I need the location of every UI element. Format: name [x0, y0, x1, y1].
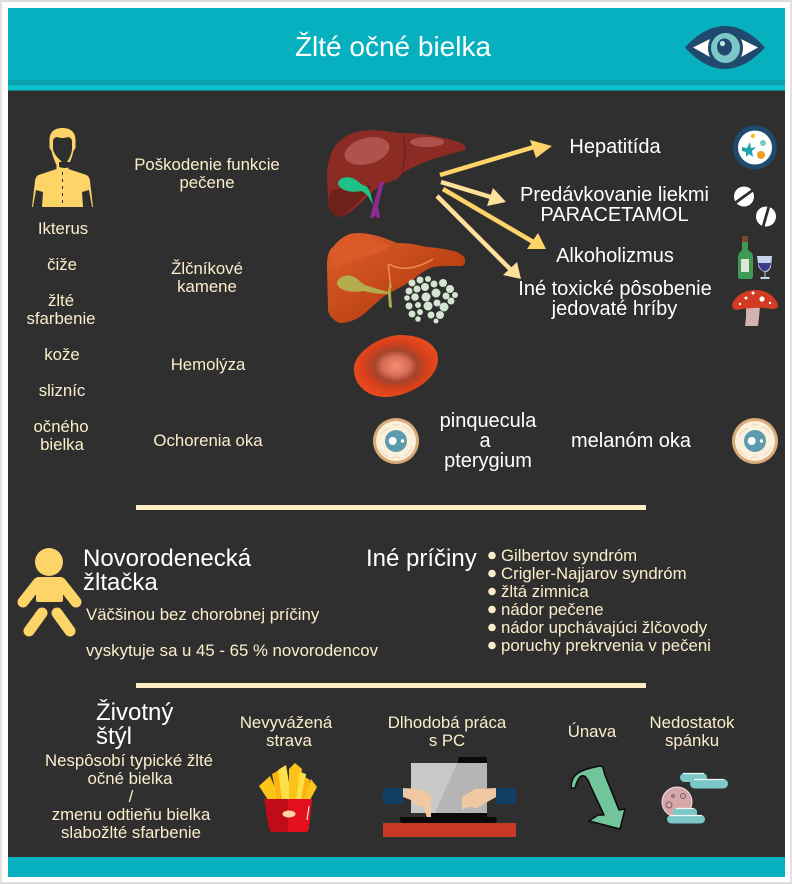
- left column: symptoms: bielka: [40, 435, 85, 454]
- eye condition labels: pinquecula: [440, 410, 537, 432]
- cause labels: Žlčníkové: [171, 259, 243, 278]
- outcome labels: Iné toxické pôsobenie: [518, 278, 712, 300]
- other causes list: Crigler-Najjarov syndróm: [501, 564, 687, 583]
- newborn heading: Novorodenecká: [83, 545, 252, 572]
- divider: [136, 683, 646, 688]
- icon: eyeball right: [732, 418, 778, 464]
- newborn text: Väčšinou bez chorobnej príčiny: [86, 605, 320, 624]
- lifestyle heading: Životný: [96, 699, 173, 726]
- lifestyle factor labels: spánku: [665, 731, 719, 750]
- cause labels: Ochorenia oka: [153, 431, 263, 450]
- lifestyle text: /: [129, 787, 134, 806]
- lifestyle factor labels: Nedostatok: [650, 713, 735, 732]
- newborn heading: žltačka: [83, 569, 158, 596]
- left column: symptoms: slizníc: [39, 381, 85, 400]
- lifestyle factor labels: strava: [266, 731, 313, 750]
- left column: symptoms: očného: [33, 417, 89, 436]
- header band: [8, 8, 785, 90]
- left column: symptoms: žlté: [48, 291, 74, 310]
- eye condition labels: pterygium: [444, 450, 532, 472]
- footer band: [8, 857, 785, 877]
- left column: symptoms: [26, 219, 96, 454]
- icon: bacteria dish: [733, 126, 777, 170]
- lifestyle text: zmenu odtieňu bielka: [52, 805, 211, 824]
- icon: baby: [23, 548, 76, 631]
- title: Žlté očné bielka: [295, 31, 491, 62]
- icon: eye: [685, 26, 765, 69]
- outcome labels: [518, 136, 712, 320]
- newborn text: vyskytuje sa u 45 - 65 % novorodencov: [86, 641, 379, 660]
- icon: moon and clouds: [662, 773, 728, 824]
- left column: symptoms: čiže: [47, 255, 77, 274]
- outcome labels: Alkoholizmus: [556, 245, 674, 267]
- eye condition labels: [440, 410, 692, 472]
- icon: laptop with hands: [383, 757, 516, 837]
- icon: down arrow: [571, 766, 625, 829]
- icon: person: [32, 128, 93, 207]
- lifestyle text: [45, 751, 213, 842]
- cause labels: kamene: [177, 277, 237, 296]
- other causes list: poruchy prekrvenia v pečeni: [501, 636, 711, 655]
- other causes list: žltá zimnica: [501, 582, 589, 601]
- lifestyle text: slabožlté sfarbenie: [61, 823, 201, 842]
- lifestyle text: očné bielka: [88, 769, 173, 788]
- lifestyle text: Nespôsobí typické žlté: [45, 751, 213, 770]
- newborn text: [86, 605, 379, 660]
- lifestyle factor labels: [240, 713, 735, 750]
- cause labels: [134, 155, 280, 450]
- left column: symptoms: sfarbenie: [26, 309, 96, 328]
- outcome labels: PARACETAMOL: [540, 204, 689, 226]
- lifestyle factor labels: Nevyvážená: [240, 713, 333, 732]
- icon: french fries: [259, 763, 317, 832]
- icon: wine bottle and glass: [738, 236, 772, 279]
- lifestyle factor labels: s PC: [429, 731, 465, 750]
- arrows: [437, 140, 552, 279]
- lifestyle heading: štýl: [96, 723, 132, 750]
- illustration: red blood cell: [354, 335, 438, 397]
- icon: eyeball left: [373, 418, 419, 464]
- left column: symptoms: Ikterus: [38, 219, 88, 238]
- other causes list: Gilbertov syndróm: [501, 546, 637, 565]
- outcome labels: Hepatitída: [569, 136, 661, 158]
- cause labels: pečene: [179, 173, 235, 192]
- outcome labels: jedovaté hríby: [551, 298, 677, 320]
- cause labels: Poškodenie funkcie: [134, 155, 280, 174]
- newborn heading: [83, 545, 252, 596]
- other causes list: nádor pečene: [501, 600, 604, 619]
- other causes list: [488, 546, 711, 655]
- other causes heading: Iné príčiny: [366, 545, 477, 572]
- icon: toadstool: [732, 290, 778, 326]
- divider: [136, 505, 646, 510]
- lifestyle factor labels: Dlhodobá práca: [388, 713, 507, 732]
- lifestyle heading: [96, 699, 173, 750]
- other causes list: nádor upchávajúci žlčovody: [501, 618, 708, 637]
- outcome labels: Predávkovanie liekmi: [520, 184, 709, 206]
- illustration: damaged liver: [327, 130, 466, 218]
- illustration: liver with gallstones: [327, 233, 465, 324]
- cause labels: Hemolýza: [171, 355, 246, 374]
- lifestyle factor labels: Únava: [568, 722, 617, 741]
- eye condition labels: a: [479, 430, 491, 452]
- left column: symptoms: kože: [44, 345, 80, 364]
- icon: pills: [734, 186, 776, 227]
- eye condition labels: melanóm oka: [571, 430, 692, 452]
